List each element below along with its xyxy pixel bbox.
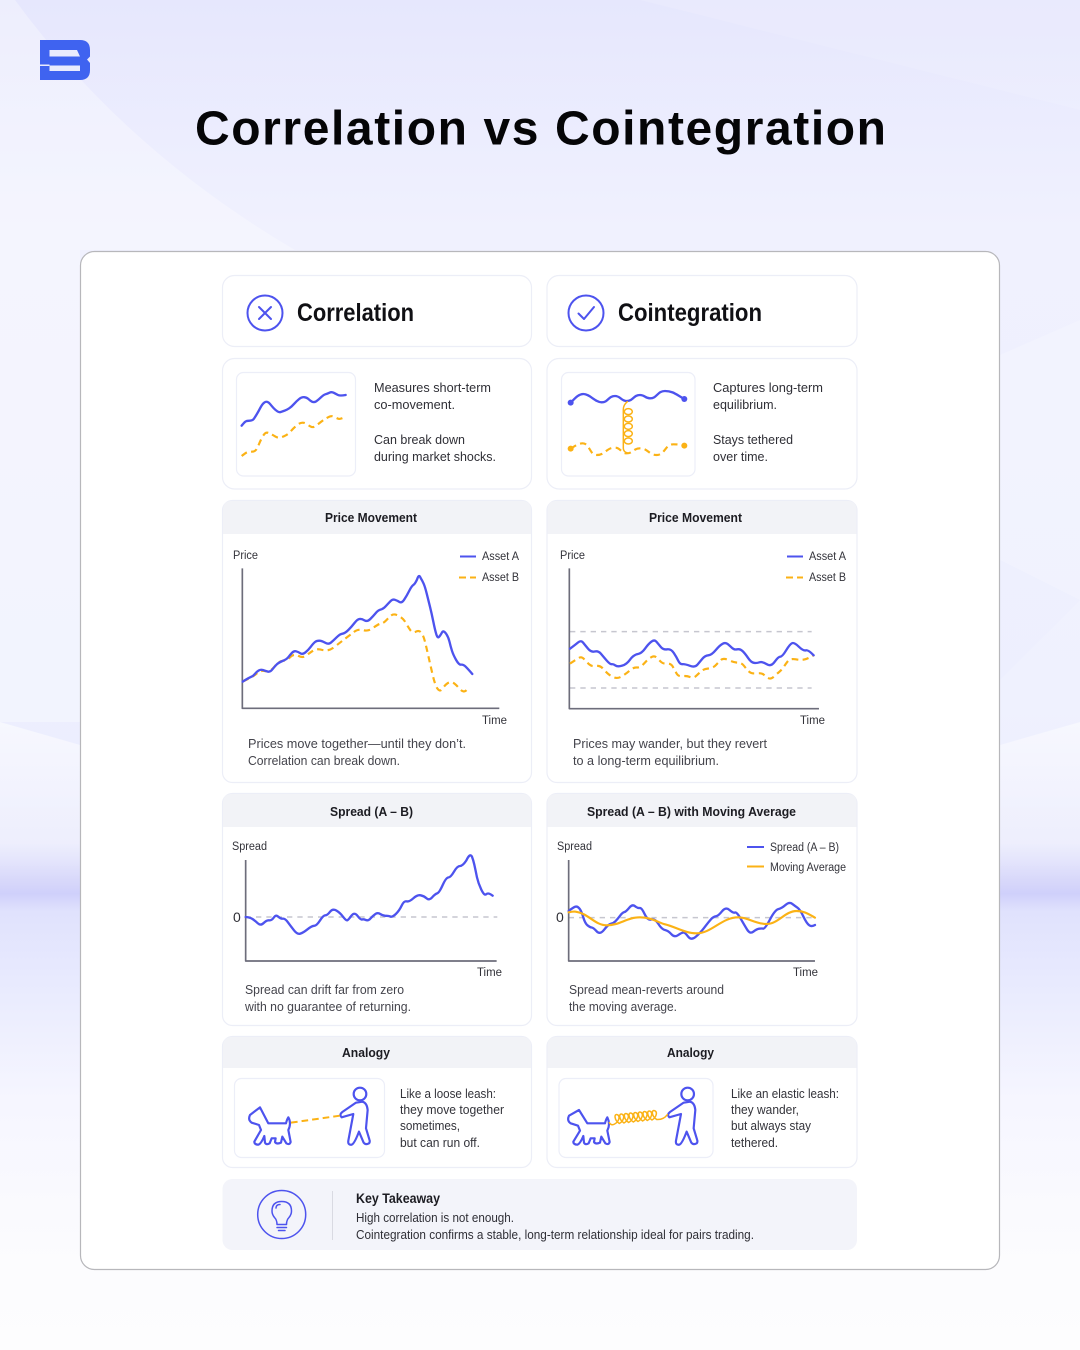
line chart: prices stay in band <box>560 550 825 727</box>
text: elastic leash <box>731 1087 839 1150</box>
heading: price movement: Price Movement <box>649 510 743 525</box>
line chart: spread mean-reverts: 0 <box>556 909 564 925</box>
panel: cointegration description <box>547 358 857 489</box>
heading: correlation: Correlation <box>297 299 414 327</box>
text: loose leash: but can run off. <box>400 1136 480 1150</box>
mini chart: tethered lines with spring <box>562 372 695 476</box>
panel: cointegration heading <box>547 276 857 346</box>
text: cointegration description: equilibrium. <box>713 398 777 412</box>
text: cointegration description: Captures long-term <box>713 381 823 395</box>
text: key takeaway: High correlation is not enough. <box>356 1211 514 1225</box>
panel: correlation price movement <box>222 500 532 782</box>
text: elastic leash: Like an elastic leash: <box>731 1087 839 1101</box>
panel: correlation description <box>222 358 532 489</box>
caption: Correlation can break down. <box>248 753 400 768</box>
panel: correlation heading <box>222 276 532 346</box>
text: correlation description: co-movement. <box>374 398 455 412</box>
caption: the moving average. <box>569 999 677 1014</box>
panel: correlation spread <box>222 794 532 1026</box>
heading: analogy: Analogy <box>342 1045 391 1060</box>
text: elastic leash: they wander, <box>731 1103 799 1117</box>
legend <box>786 551 846 584</box>
text: loose leash <box>400 1087 504 1150</box>
text: loose leash: they move together <box>400 1103 504 1117</box>
legend: Asset A <box>482 551 519 563</box>
line chart: prices stay in band: Time <box>800 715 825 727</box>
heading: cointegration: Cointegration <box>618 299 762 327</box>
caption: Prices move together—until they don’t. <box>248 736 466 751</box>
heading: spread: Spread (A – B) <box>330 804 413 819</box>
text: loose leash: Like a loose leash: <box>400 1087 496 1101</box>
panel: cointegration spread <box>547 794 857 1026</box>
caption <box>573 736 767 768</box>
legend: Asset B <box>809 572 846 584</box>
line chart: spread drifts: Spread <box>232 841 267 853</box>
heading: spread with moving average: Spread (A – B) with Moving Average <box>587 804 796 819</box>
legend <box>747 842 846 874</box>
icon: light bulb <box>258 1190 306 1238</box>
text: cointegration description: over time. <box>713 450 768 464</box>
line chart: spread mean-reverts: Time <box>793 967 818 979</box>
line chart: prices diverge: Price <box>233 550 258 562</box>
caption: with no guarantee of returning. <box>244 999 411 1014</box>
mini chart: correlated lines <box>236 372 356 476</box>
title: Correlation vs Cointegration <box>195 102 886 156</box>
legend <box>459 551 519 584</box>
text: key takeaway <box>356 1191 754 1242</box>
legend: Moving Average <box>770 862 846 874</box>
line chart: prices diverge: Time <box>482 715 507 727</box>
panel: correlation analogy <box>222 1036 532 1168</box>
line chart: spread mean-reverts: Spread <box>557 841 592 853</box>
text: correlation description: Measures short-term <box>374 381 491 395</box>
main panel <box>80 252 1000 1270</box>
text: correlation description: Can break down <box>374 433 465 447</box>
caption: Spread mean-reverts around <box>569 982 724 997</box>
caption: Prices may wander, but they revert <box>573 736 767 751</box>
icon: check in circle <box>568 296 604 330</box>
caption: to a long-term equilibrium. <box>573 753 719 768</box>
text: correlation description: during market shocks. <box>374 450 496 464</box>
icon: cross in circle <box>248 296 282 330</box>
line chart: spread drifts <box>232 841 502 979</box>
line chart: prices stay in band: Price <box>560 550 585 562</box>
text: elastic leash: but always stay <box>731 1119 812 1133</box>
legend: Asset A <box>809 551 846 563</box>
text: elastic leash: tethered. <box>731 1136 778 1150</box>
legend: Asset B <box>482 572 519 584</box>
line chart: spread mean-reverts <box>556 841 818 979</box>
heading: price movement: Price Movement <box>325 510 418 525</box>
text: correlation description <box>374 381 496 464</box>
line chart: spread drifts: Time <box>477 967 502 979</box>
caption <box>569 982 724 1014</box>
legend: Spread (A – B) <box>770 842 839 854</box>
icon: dog on loose leash <box>234 1078 384 1158</box>
icon: dog on elastic leash <box>559 1078 713 1158</box>
caption: Spread can drift far from zero <box>245 982 404 997</box>
text: loose leash: sometimes, <box>400 1119 460 1133</box>
text: cointegration description <box>713 381 823 464</box>
text: key takeaway: Cointegration confirms a stable, long-term relationship ideal for pairs trading. <box>356 1228 754 1242</box>
line chart: prices diverge <box>233 550 507 727</box>
heading: analogy: Analogy <box>667 1045 715 1060</box>
text: cointegration description: Stays tethered <box>713 433 793 447</box>
logo <box>40 40 90 80</box>
panel: key takeaway <box>222 1179 857 1250</box>
panel: cointegration price movement <box>547 500 857 782</box>
panel: cointegration analogy <box>547 1036 857 1168</box>
caption <box>244 982 411 1014</box>
text: key takeaway: Key Takeaway <box>356 1191 440 1206</box>
line chart: spread drifts: 0 <box>233 909 241 925</box>
caption <box>248 736 466 768</box>
